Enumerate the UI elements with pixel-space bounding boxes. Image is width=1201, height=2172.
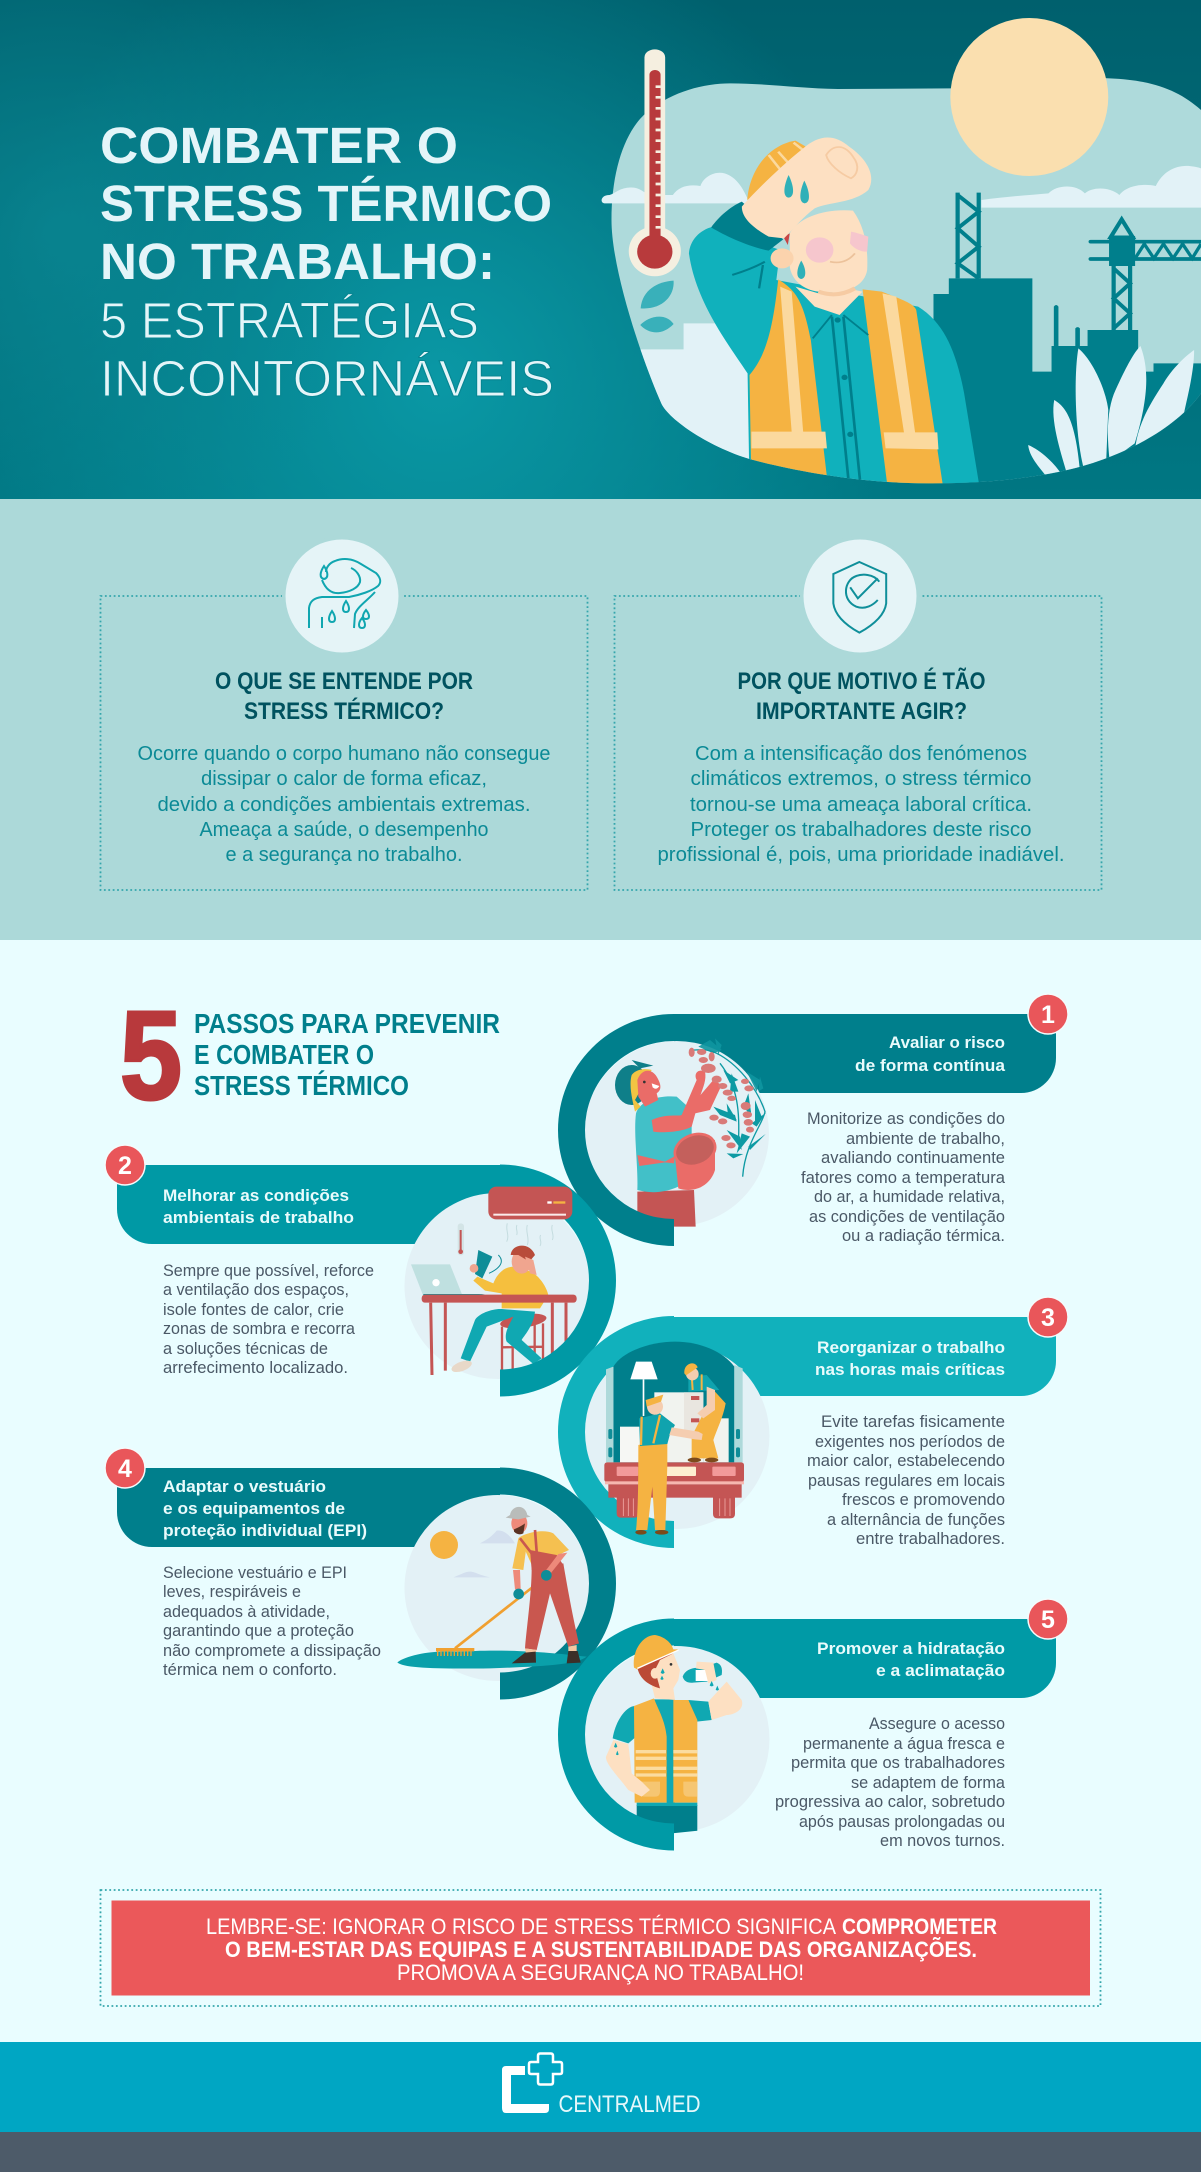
- text block: [807, 1412, 1005, 1548]
- callout: reminder: COMPROMETER: [842, 1914, 997, 1939]
- text block: frescos e promovendo: [842, 1490, 1005, 1509]
- icon: city skyline: [933, 278, 1201, 487]
- title: [100, 117, 554, 407]
- heading: 5 steps: 5: [120, 985, 182, 1126]
- text block: Proteger os trabalhadores deste risco: [690, 819, 1032, 841]
- text block: tornou-se uma ameaça laboral crítica.: [690, 794, 1032, 816]
- text block: a alternância de funções: [827, 1510, 1005, 1529]
- icon: thermometer: [629, 49, 681, 276]
- safety vest right: [863, 289, 943, 487]
- text block: pausas regulares em locais: [808, 1471, 1005, 1490]
- step title: e a aclimatação: [876, 1661, 1005, 1680]
- callout: reminder: PROMOVA A SEGURANÇA NO TRABALHO!: [397, 1960, 804, 1985]
- text block: e a segurança no trabalho.: [226, 844, 462, 866]
- text block: leves, respiráveis e: [163, 1582, 301, 1601]
- step title: [855, 1033, 1006, 1075]
- panel: step 1: [558, 994, 1068, 1246]
- icon: step number 4: 4: [118, 1455, 132, 1483]
- shirt placket and collar: [832, 317, 861, 487]
- heading: 5 steps: E COMBATER O: [194, 1039, 374, 1070]
- text block: em novos turnos.: [880, 1831, 1005, 1850]
- step title: e os equipamentos de: [163, 1499, 345, 1518]
- text block: após pausas prolongadas ou: [799, 1812, 1005, 1831]
- text block: isole fontes de calor, crie: [163, 1300, 344, 1319]
- text block: Assegure o acesso: [869, 1714, 1005, 1733]
- step title: Promover a hidratação: [817, 1639, 1005, 1658]
- text block: entre trabalhadores.: [856, 1529, 1005, 1548]
- step title: [163, 1477, 367, 1540]
- icon: sun: [950, 18, 1108, 176]
- icon: step number 2: [105, 1145, 145, 1185]
- text block: térmica nem o conforto.: [163, 1660, 337, 1679]
- icon: step number 1: 1: [1041, 1001, 1055, 1029]
- step title: Avaliar o risco: [889, 1033, 1005, 1052]
- text block: ambiente de trabalho,: [846, 1129, 1005, 1148]
- text block: climáticos extremos, o stress térmico: [690, 768, 1032, 790]
- text block: Sempre que possível, reforce: [163, 1261, 374, 1280]
- step title: [163, 1186, 354, 1227]
- title: INCONTORNÁVEIS: [100, 350, 554, 407]
- text block: Com a intensificação dos fenómenos: [695, 743, 1027, 765]
- icon: step number 5: 5: [1041, 1606, 1055, 1634]
- text block: [658, 743, 1064, 866]
- text block: Evite tarefas fisicamente: [821, 1412, 1005, 1431]
- step title: de forma contínua: [855, 1056, 1006, 1075]
- text block: se adaptem de forma: [851, 1773, 1006, 1792]
- icon: step number 5: [1028, 1599, 1068, 1639]
- text block: [801, 1109, 1006, 1245]
- step title: ambientais de trabalho: [163, 1208, 354, 1227]
- illustration: worker at desk: [411, 1223, 577, 1375]
- text block: [163, 1261, 374, 1377]
- icon: plants: [1028, 346, 1194, 477]
- text block: permanente a água fresca e: [803, 1734, 1005, 1753]
- text block: profissional é, pois, uma prioridade inadiável.: [658, 844, 1064, 866]
- raised forearm and fist: [742, 137, 871, 238]
- heading: O QUE SE ENTENDE POR: [215, 668, 473, 695]
- heading: [738, 667, 986, 725]
- panel: step 2: [105, 1145, 616, 1396]
- text block: Ameaça a saúde, o desempenho: [200, 819, 488, 841]
- text block: Selecione vestuário e EPI: [163, 1563, 347, 1582]
- sweat drops: [784, 175, 793, 198]
- icon: step number 3: [1028, 1297, 1068, 1337]
- heading: IMPORTANTE AGIR?: [756, 698, 967, 725]
- illustration: overheated worker on construction site: [602, 18, 1201, 487]
- logo: Centralmed: CENTRALMED: [558, 2091, 700, 2118]
- text block: avaliando continuamente: [821, 1148, 1005, 1167]
- callout: reminder: O BEM-ESTAR DAS EQUIPAS E A SUSTENTABILIDADE DAS ORGANIZAÇÕES.: [225, 1937, 977, 1962]
- neck: [795, 287, 863, 315]
- icon: step number 1: [1028, 994, 1068, 1034]
- panel: definitions section: [0, 499, 1201, 940]
- title: 5 ESTRATÉGIAS: [100, 292, 479, 349]
- icon: shield with check: [833, 562, 886, 633]
- title: NO TRABALHO:: [100, 233, 495, 290]
- icon: lattice tower: [958, 193, 979, 278]
- heading: 5 steps: STRESS TÉRMICO: [194, 1070, 409, 1101]
- text block: a ventilação dos espaços,: [163, 1280, 349, 1299]
- hard hat: [747, 141, 809, 200]
- text block: maior calor, estabelecendo: [807, 1451, 1005, 1470]
- text block: [138, 743, 550, 866]
- text block: do ar, a humidade relativa,: [814, 1187, 1005, 1206]
- icon: step number 4: [105, 1448, 145, 1488]
- heading: POR QUE MOTIVO É TÃO: [738, 667, 986, 695]
- text block: adequados à atividade,: [163, 1602, 330, 1621]
- panel: step 5: [558, 1599, 1068, 1850]
- text block: arrefecimento localizado.: [163, 1358, 348, 1377]
- panel: footer: [0, 2042, 1201, 2172]
- icon: crane: [1091, 219, 1201, 330]
- safety vest left: [749, 279, 828, 487]
- panel: what is heat stress: [100, 536, 588, 890]
- illustration: workers loading a truck: [604, 1342, 744, 1535]
- heading: [215, 668, 473, 725]
- callout: reminder: [100, 1890, 1100, 2006]
- icon: right cloud: [981, 166, 1201, 208]
- text block: Monitorize as condições do: [807, 1109, 1005, 1128]
- icon: step number 3: 3: [1041, 1304, 1055, 1332]
- callout: reminder: LEMBRE-SE: IGNORAR O RISCO DE STRESS TÉRMICO SIGNIFICA: [206, 1914, 836, 1939]
- title: STRESS TÉRMICO: [100, 175, 552, 232]
- icon: leaves: [640, 281, 674, 332]
- text block: fatores como a temperatura: [801, 1168, 1006, 1187]
- step title: Reorganizar o trabalho: [817, 1338, 1005, 1357]
- head: [790, 210, 867, 292]
- text block: exigentes nos períodos de: [815, 1432, 1005, 1451]
- text block: dissipar o calor de forma eficaz,: [201, 768, 487, 790]
- step title: [817, 1639, 1005, 1680]
- icon: sweating person: [309, 559, 380, 628]
- illustration: trousers of worker drinking: [637, 1805, 697, 1833]
- text block: [163, 1563, 381, 1679]
- text block: as condições de ventilação: [809, 1207, 1005, 1226]
- illustration: harvesting worker: [615, 1038, 766, 1227]
- text block: Ocorre quando o corpo humano não consegue: [138, 743, 550, 765]
- panel: step 3: [558, 1297, 1068, 1548]
- icon: step number 2: 2: [118, 1152, 132, 1180]
- step title: Melhorar as condições: [163, 1186, 349, 1205]
- text block: não compromete a dissipação: [163, 1641, 381, 1660]
- sleeve cuff: [711, 202, 783, 251]
- heading: STRESS TÉRMICO?: [244, 697, 444, 725]
- illustration: worker raking outdoors: [397, 1507, 587, 1669]
- icon: air conditioner: [488, 1187, 572, 1219]
- worker figure: [689, 137, 979, 487]
- text block: progressiva ao calor, sobretudo: [775, 1792, 1005, 1811]
- text block: [775, 1714, 1006, 1850]
- lower-left pale building: [640, 323, 752, 460]
- logo: Centralmed: [502, 2054, 700, 2118]
- step title: nas horas mais críticas: [815, 1360, 1005, 1379]
- icon: left cloud: [602, 173, 749, 203]
- text block: devido a condições ambientais extremas.: [158, 794, 530, 816]
- step title: proteção individual (EPI): [163, 1521, 367, 1540]
- illustration: worker drinking water: [606, 1635, 742, 1806]
- title: COMBATER O: [100, 117, 458, 174]
- text block: permita que os trabalhadores: [791, 1753, 1005, 1772]
- panel: why act: [614, 536, 1102, 890]
- heading: 5 steps: [120, 985, 500, 1126]
- text block: zonas de sombra e recorra: [163, 1319, 356, 1338]
- panel: step 4: [105, 1448, 616, 1700]
- text block: garantindo que a proteção: [163, 1621, 354, 1640]
- panel: hero header: [0, 0, 1201, 499]
- step title: [815, 1338, 1005, 1379]
- text block: a soluções técnicas de: [163, 1339, 328, 1358]
- step title: Adaptar o vestuário: [163, 1477, 326, 1496]
- heading: 5 steps: PASSOS PARA PREVENIR: [194, 1008, 500, 1039]
- text block: ou a radiação térmica.: [842, 1226, 1005, 1245]
